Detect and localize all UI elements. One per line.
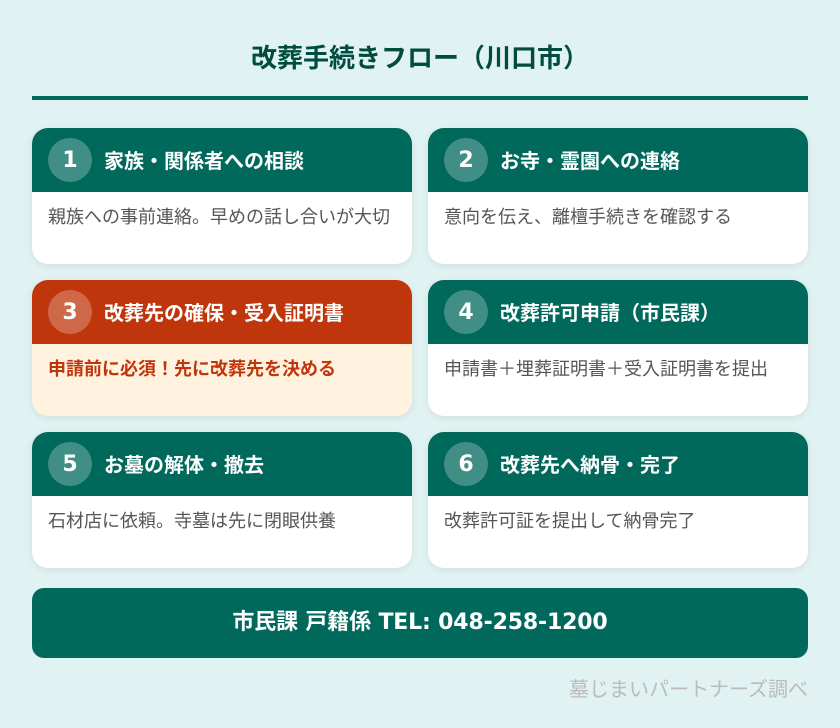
- step 1 heading: 家族・関係者への相談: [104, 149, 304, 173]
- step 6 header: [428, 432, 808, 496]
- step 5 number badge: [48, 442, 92, 486]
- panel: step 2: [428, 128, 808, 264]
- step 4 number badge: 4: [458, 300, 474, 325]
- title: 改葬手続きフロー（川口市）: [251, 44, 589, 74]
- step 3 description: 申請前に必須！先に改葬先を決める: [48, 359, 336, 380]
- step 2 description: 意向を伝え、離檀手続きを確認する: [444, 207, 732, 228]
- step 3 number badge: 3: [62, 300, 78, 325]
- step 5 header: [32, 432, 412, 496]
- step 2 header: [428, 128, 808, 192]
- panel: step 6: [428, 432, 808, 568]
- step 6 description: 改葬許可証を提出して納骨完了: [444, 511, 695, 532]
- step 4 number badge: [444, 290, 488, 334]
- panel: step 4: [428, 280, 808, 416]
- step 1 header: [32, 128, 412, 192]
- panel: step 1: [32, 128, 412, 264]
- step 4 heading: 改葬許可申請（市民課）: [500, 301, 720, 325]
- step 6 number badge: [444, 442, 488, 486]
- step 3 number badge: [48, 290, 92, 334]
- step 6 heading: 改葬先へ納骨・完了: [500, 453, 680, 477]
- step 2 heading: お寺・霊園への連絡: [500, 149, 680, 173]
- step 5 number badge: 5: [62, 452, 78, 477]
- panel: step 5: [32, 432, 412, 568]
- step 3 header: [32, 280, 412, 344]
- panel: step 3 (warning): [32, 280, 412, 416]
- step 6 number badge: 6: [458, 452, 474, 477]
- step 5 heading: お墓の解体・撤去: [104, 453, 264, 477]
- step 3 heading: 改葬先の確保・受入証明書: [104, 301, 344, 325]
- step 2 number badge: [444, 138, 488, 182]
- contact bar: 市民課 戸籍係 TEL: 048-258-1200: [232, 610, 608, 635]
- step 4 header: [428, 280, 808, 344]
- step 2 number badge: 2: [458, 148, 474, 173]
- step 1 number badge: [48, 138, 92, 182]
- source note: 墓じまいパートナーズ調べ: [569, 677, 808, 701]
- step 1 number badge: 1: [62, 148, 78, 173]
- step 5 description: 石材店に依頼。寺墓は先に閉眼供養: [48, 511, 336, 532]
- step 4 description: 申請書＋埋葬証明書＋受入証明書を提出: [444, 359, 768, 380]
- step 1 description: 親族への事前連絡。早めの話し合いが大切: [48, 207, 390, 228]
- contact bar: [32, 588, 808, 658]
